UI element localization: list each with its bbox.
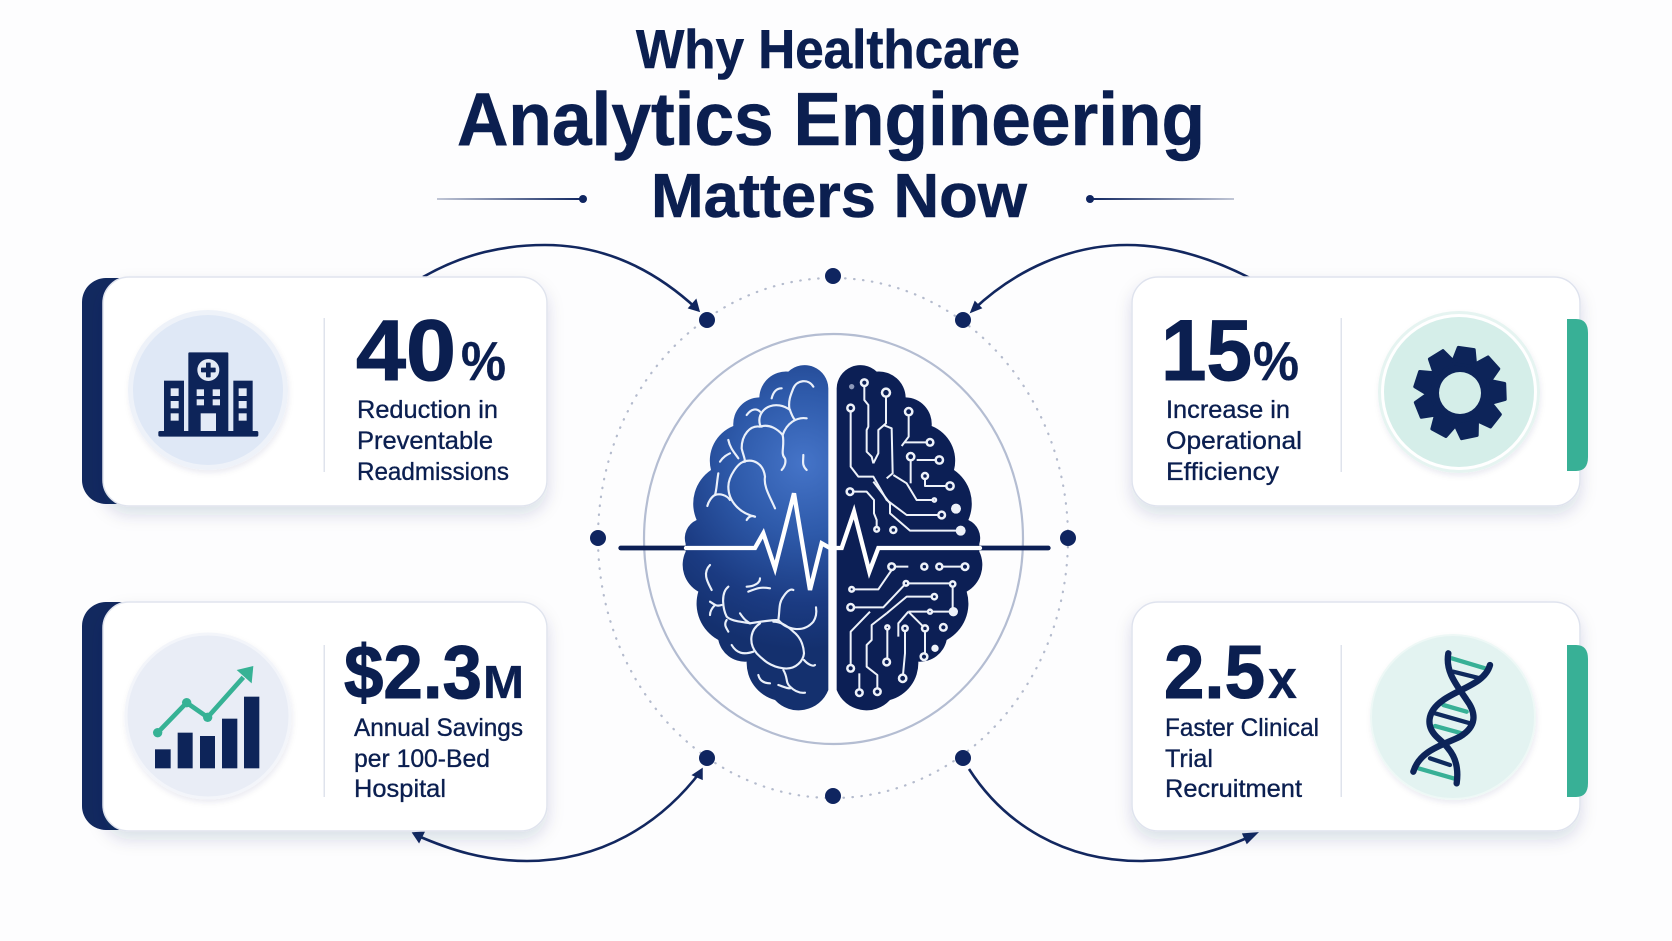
arrow: bottom left — [413, 769, 702, 861]
card: 2.5x recruitment — [1132, 602, 1588, 831]
stat value: 15%: 15 — [1161, 303, 1252, 399]
divider — [324, 645, 325, 797]
card accent bar — [82, 602, 142, 830]
arrow: top right — [971, 245, 1250, 312]
card: $2.3M savings — [82, 602, 547, 831]
stat value: 15%: % — [1253, 330, 1299, 392]
card accent bar — [1567, 645, 1588, 797]
stat description: Readmissions — [357, 458, 509, 486]
stat value: $2.3M: $2.3 — [344, 630, 482, 714]
heartbeat line — [621, 493, 1048, 590]
stat description: Reduction in — [357, 396, 498, 424]
stat description — [354, 714, 523, 803]
title — [457, 18, 1205, 231]
stat value: 2.5x: x — [1268, 648, 1297, 710]
card accent bar — [1567, 319, 1588, 471]
stat value: $2.3M: M — [483, 656, 524, 708]
stat description — [357, 396, 509, 486]
icon: bar chart with rising arrow — [126, 634, 290, 798]
stat description: Efficiency — [1166, 458, 1280, 486]
dotted orbit with nodes — [590, 268, 1076, 804]
arrow: top left — [423, 245, 699, 311]
divider — [324, 318, 325, 472]
card: 15% efficiency — [1132, 277, 1588, 506]
card body — [103, 602, 547, 831]
card body — [1132, 602, 1580, 831]
stat description: Preventable — [357, 427, 493, 455]
title right ornament — [1086, 195, 1234, 203]
central brain with heartbeat — [621, 365, 1048, 710]
title: Why Healthcare — [636, 18, 1020, 80]
stat description — [1165, 714, 1319, 803]
stat description: Trial — [1165, 745, 1213, 773]
title left ornament — [437, 195, 587, 203]
stat description: Annual Savings — [354, 714, 523, 742]
stat description: Recruitment — [1165, 775, 1302, 803]
divider — [1340, 645, 1342, 797]
card body — [103, 277, 547, 506]
stat value: 40%: % — [461, 330, 506, 392]
icon: gear — [1378, 311, 1540, 473]
stat description: Hospital — [354, 775, 446, 803]
title: Matters Now — [651, 162, 1028, 231]
card body — [1132, 277, 1580, 506]
stat description: Increase in — [1166, 396, 1290, 424]
stat description — [1166, 396, 1302, 486]
stat value: 40% — [356, 303, 506, 399]
icon: DNA helix — [1371, 635, 1535, 799]
title: Analytics Engineering — [457, 77, 1205, 161]
card accent bar — [82, 278, 142, 504]
arrow: bottom right — [969, 769, 1257, 861]
icon: hospital — [128, 310, 288, 470]
stat value: 15% — [1161, 303, 1299, 399]
card: 40% reduction — [82, 277, 547, 506]
divider — [1340, 318, 1342, 472]
stat value: 40%: 40 — [356, 303, 456, 399]
central brain ring — [644, 334, 1023, 744]
brain: biological hemisphere — [683, 365, 828, 710]
brain: circuit hemisphere — [837, 365, 982, 710]
stat description: Faster Clinical — [1165, 714, 1319, 742]
stat description: per 100-Bed — [354, 745, 490, 773]
stat value: 2.5x: 2.5 — [1164, 630, 1265, 714]
stat description: Operational — [1166, 427, 1302, 455]
